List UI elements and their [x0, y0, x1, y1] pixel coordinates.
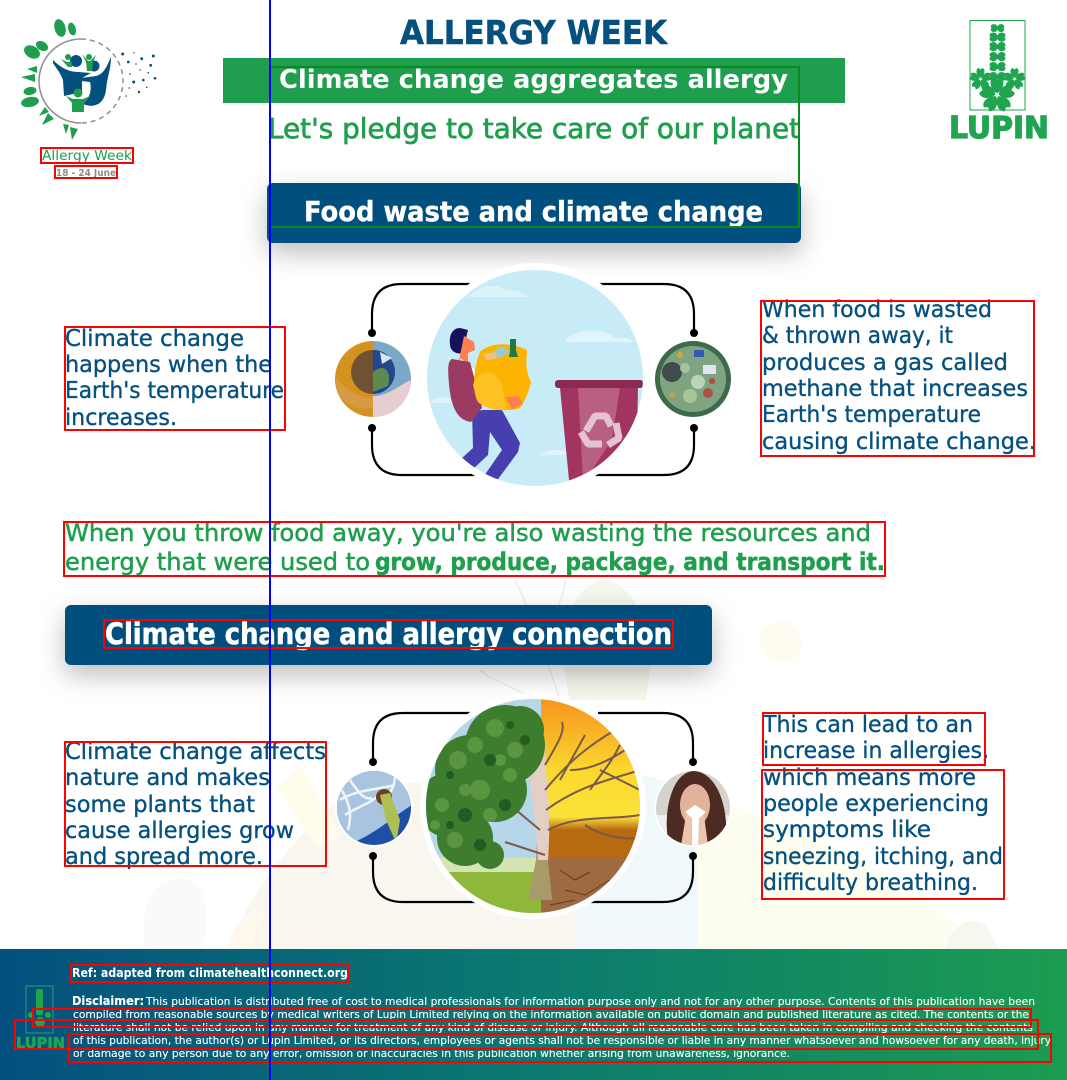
- logo: Lupin top right: LUPIN: [949, 111, 1049, 146]
- disclaimer: literature shall not be relied upon in any manner for treatment of any kind of disease or injury. Although all reasonable care has been taken in compiling and checking the contents: [73, 1021, 1033, 1034]
- text: plants: cause allergies grow: [65, 818, 294, 844]
- heading: food waste: [267, 183, 801, 243]
- callout: food waste methane: causing climate change.: [762, 429, 1036, 455]
- text: plants: Climate change affects: [65, 739, 326, 765]
- text: climate change definition: Earth's temperature: [65, 378, 284, 404]
- logo: Lupin top right: [949, 20, 1049, 146]
- disclaimer: [72, 994, 1051, 1060]
- icon: earth in hands: [335, 341, 411, 417]
- text: plants: [65, 739, 326, 870]
- icon: woman sneezing: [654, 769, 732, 847]
- pledge line: Let's pledge to take care of our planet: [268, 112, 800, 145]
- small Lupin logo: LUPIN: [16, 1034, 65, 1052]
- disclaimer: This publication is distributed free of cost to medical professionals for information purpose only and not for any other purpose. Contents of this publication have been: [145, 995, 1035, 1008]
- green statement: grow, produce, package, and transport it.: [375, 548, 885, 576]
- recycling symbol: [581, 416, 619, 445]
- callout: allergy symptoms: symptoms like: [763, 817, 931, 843]
- central image: half green half dry tree: [420, 693, 646, 919]
- callout: allergy symptoms: increase in allergies,: [763, 738, 989, 764]
- disclaimer: of this publication, the author(s) or Lupin Limited, or its directors, employees or agents shall not be responsible or liable in any manner whatsoever and howsoever for any death, injury: [73, 1034, 1051, 1047]
- diagram: food waste: [335, 263, 731, 493]
- footer band: [0, 949, 1067, 1080]
- logo caption: Allergy Week: [42, 149, 132, 164]
- callout: allergy symptoms: This can lead to an: [762, 712, 973, 738]
- text: plants: nature and makes: [65, 765, 270, 791]
- text: plants: and spread more.: [65, 844, 263, 870]
- family figures: [53, 55, 111, 106]
- callout: food waste methane: & thrown away, it: [762, 323, 953, 349]
- dots: [121, 52, 156, 97]
- heading: allergy connection: Climate change and allergy connection: [105, 617, 672, 651]
- trunk and branches: [528, 820, 552, 900]
- man: [462, 410, 520, 480]
- text: climate change definition: Climate change: [65, 326, 244, 352]
- diagram: allergy connection: [335, 693, 732, 920]
- small Lupin logo: [16, 986, 65, 1052]
- faint background illustration: [144, 578, 1000, 950]
- icon: food waste bin: [655, 341, 731, 417]
- disclaimer: compiled from reasonable sources by medical writers of Lupin Limited relying on the information available on public domain and published literature as cited. The contents or the: [73, 1008, 1029, 1021]
- callout: allergy symptoms: which means more: [763, 765, 976, 791]
- ring: [39, 39, 123, 123]
- subtitle banner: [223, 58, 845, 103]
- heading: allergy connection: [65, 605, 712, 665]
- callout: food waste methane: methane that increases: [762, 376, 1028, 402]
- text: plants: some plants that: [65, 792, 255, 818]
- title: ALLERGY WEEK: [400, 13, 668, 52]
- callout: food waste methane: [762, 297, 1036, 455]
- icon: dandelion: [335, 769, 413, 847]
- connectors: [373, 713, 693, 902]
- connectors: [372, 284, 694, 475]
- leaves: [20, 18, 78, 140]
- subtitle banner: Climate change aggregates allergy: [279, 65, 788, 95]
- text: climate change definition: [65, 326, 284, 431]
- disclaimer: or damage to any person due to any error, omission or inaccuracies in this publication whether arising from unawareness, ignorance.: [73, 1047, 790, 1060]
- green statement: energy that were used to: [65, 548, 370, 576]
- green statement: [65, 519, 885, 576]
- disclaimer: Disclaimer:: [72, 994, 144, 1008]
- callout: allergy symptoms: sneezing, itching, and: [763, 844, 1003, 870]
- callout: allergy symptoms: [762, 712, 1003, 896]
- callout: allergy symptoms: difficulty breathing.: [763, 870, 978, 896]
- heading: food waste: Food waste and climate change: [304, 195, 763, 228]
- callout: food waste methane: produces a gas called: [762, 350, 1008, 376]
- reference: Ref: adapted from climatehealthconnect.org: [72, 965, 348, 980]
- logo: Allergy Week: [20, 18, 156, 179]
- bin: [560, 388, 638, 490]
- green statement: When you throw food away, you're also wasting the resources and: [65, 519, 871, 547]
- text: climate change definition: increases.: [65, 405, 177, 431]
- callout: allergy symptoms: people experiencing: [763, 791, 989, 817]
- callout: food waste methane: When food is wasted: [762, 297, 992, 323]
- text: climate change definition: happens when the: [65, 352, 272, 378]
- foliage: [420, 705, 545, 869]
- central image: man carrying waste to bin: [420, 263, 650, 493]
- logo: Allergy Week: 18 - 24 June: [56, 168, 116, 179]
- callout: food waste methane: Earth's temperature: [762, 402, 981, 428]
